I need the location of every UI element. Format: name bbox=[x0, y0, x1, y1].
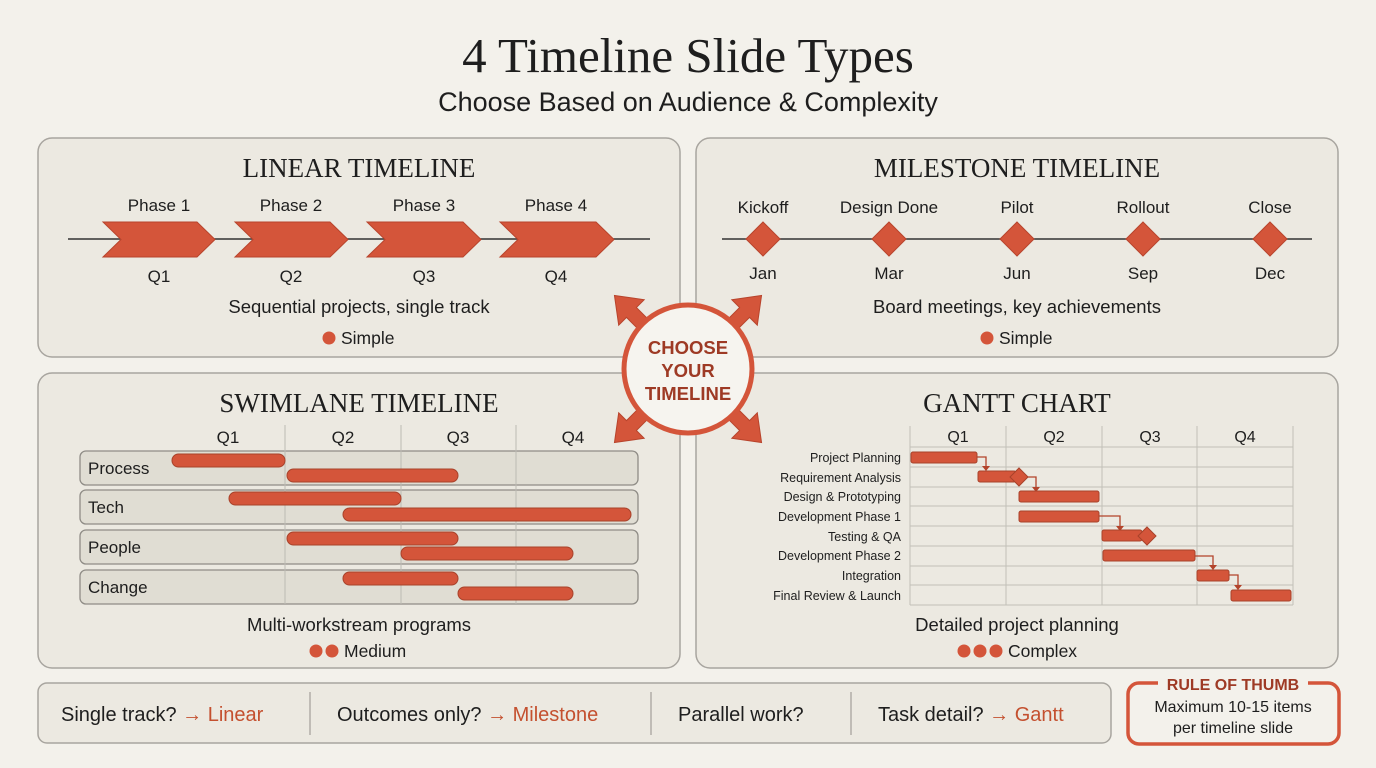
panel: swimlane timeline: Q2 bbox=[332, 428, 354, 447]
panel: swimlane timeline: Multi-workstream programs bbox=[247, 614, 471, 635]
panel: milestone timeline: Jun bbox=[1003, 264, 1031, 283]
subtitle: Choose Based on Audience & Complexity bbox=[438, 87, 938, 117]
panel: gantt chart: Requirement Analysis bbox=[780, 471, 901, 485]
callout: rule of thumb: Maximum 10-15 items bbox=[1154, 699, 1312, 716]
panel: milestone timeline: Simple bbox=[999, 328, 1052, 348]
panel: milestone timeline bbox=[696, 138, 1338, 357]
panel: swimlane timeline: Q1 bbox=[217, 428, 239, 447]
panel: gantt chart: Final Review & Launch bbox=[773, 589, 901, 603]
panel: linear timeline: Q1 bbox=[148, 267, 170, 286]
panel: linear timeline bbox=[38, 138, 680, 357]
title: 4 Timeline Slide Types bbox=[462, 28, 914, 83]
panel: gantt chart: GANTT CHART bbox=[923, 388, 1111, 418]
panel: milestone timeline: Rollout bbox=[1117, 198, 1170, 217]
panel: linear timeline: LINEAR TIMELINE bbox=[243, 153, 475, 183]
panel: swimlane timeline: Medium bbox=[344, 641, 406, 661]
decision bar: Task detail? → Gantt bbox=[878, 704, 1064, 726]
panel: gantt chart bbox=[696, 373, 1338, 668]
panel: gantt chart: Q2 bbox=[1043, 429, 1065, 446]
panel: linear timeline: Phase 3 bbox=[393, 196, 455, 215]
decision bar bbox=[38, 683, 1111, 743]
panel: gantt chart: Detailed project planning bbox=[915, 614, 1119, 635]
callout: rule of thumb: RULE OF THUMB bbox=[1167, 677, 1299, 694]
panel: linear timeline: Phase 1 bbox=[128, 196, 190, 215]
panel: milestone timeline: Dec bbox=[1255, 264, 1286, 283]
callout: rule of thumb: per timeline slide bbox=[1173, 720, 1293, 737]
panel: gantt chart: Project Planning bbox=[810, 451, 901, 465]
panel: linear timeline: Simple bbox=[341, 328, 394, 348]
panel: linear timeline: Phase 4 bbox=[525, 196, 587, 215]
panel: swimlane timeline: People bbox=[88, 538, 141, 557]
panel: milestone timeline: Board meetings, key achievements bbox=[873, 296, 1161, 317]
center badge: choose your timeline: TIMELINE bbox=[645, 383, 731, 404]
panel: linear timeline: Q2 bbox=[280, 267, 302, 286]
panel: gantt chart: Q1 bbox=[947, 429, 969, 446]
panel: milestone timeline: Design Done bbox=[840, 198, 938, 217]
panel: milestone timeline: MILESTONE TIMELINE bbox=[874, 153, 1160, 183]
panel: linear timeline: Q3 bbox=[413, 267, 435, 286]
panel: gantt chart: Testing & QA bbox=[828, 530, 902, 544]
panel: gantt chart: Development Phase 2 bbox=[778, 549, 901, 563]
panel: swimlane timeline bbox=[38, 373, 680, 668]
panel: milestone timeline: Pilot bbox=[1000, 198, 1034, 217]
panel: milestone timeline: Mar bbox=[874, 264, 904, 283]
panel: milestone timeline: Sep bbox=[1128, 264, 1158, 283]
center badge: choose your timeline: YOUR bbox=[661, 360, 715, 381]
panel: gantt chart: Q4 bbox=[1234, 429, 1256, 446]
panel: gantt chart: Complex bbox=[1008, 641, 1077, 661]
panel: swimlane timeline: Tech bbox=[88, 498, 124, 517]
panel: swimlane timeline: Change bbox=[88, 578, 148, 597]
panel: linear timeline: Sequential projects, single track bbox=[228, 296, 490, 317]
panel: gantt chart: Development Phase 1 bbox=[778, 510, 901, 524]
panel: swimlane timeline: SWIMLANE TIMELINE bbox=[219, 388, 499, 418]
decision bar: Outcomes only? → Milestone bbox=[337, 704, 598, 726]
center badge: choose your timeline bbox=[624, 305, 752, 433]
panel: milestone timeline: Jan bbox=[749, 264, 777, 283]
panel: swimlane timeline: Q3 bbox=[447, 428, 469, 447]
panel: milestone timeline: Close bbox=[1248, 198, 1292, 217]
center badge: choose your timeline: CHOOSE bbox=[648, 337, 728, 358]
panel: linear timeline: Phase 2 bbox=[260, 196, 322, 215]
callout: rule of thumb bbox=[1128, 673, 1339, 744]
arrows: choose directions bbox=[602, 283, 774, 455]
panel: linear timeline: Q4 bbox=[545, 267, 567, 286]
panel: gantt chart: Q3 bbox=[1139, 429, 1161, 446]
decision bar: Parallel work? bbox=[678, 704, 804, 726]
panel: gantt chart: Integration bbox=[842, 569, 901, 583]
panel: swimlane timeline: Process bbox=[88, 459, 149, 478]
panel: swimlane timeline: Q4 bbox=[562, 428, 584, 447]
panel: gantt chart: Design & Prototyping bbox=[784, 490, 901, 504]
decision bar: Single track? → Linear bbox=[61, 704, 264, 726]
panel: milestone timeline: Kickoff bbox=[738, 198, 789, 217]
